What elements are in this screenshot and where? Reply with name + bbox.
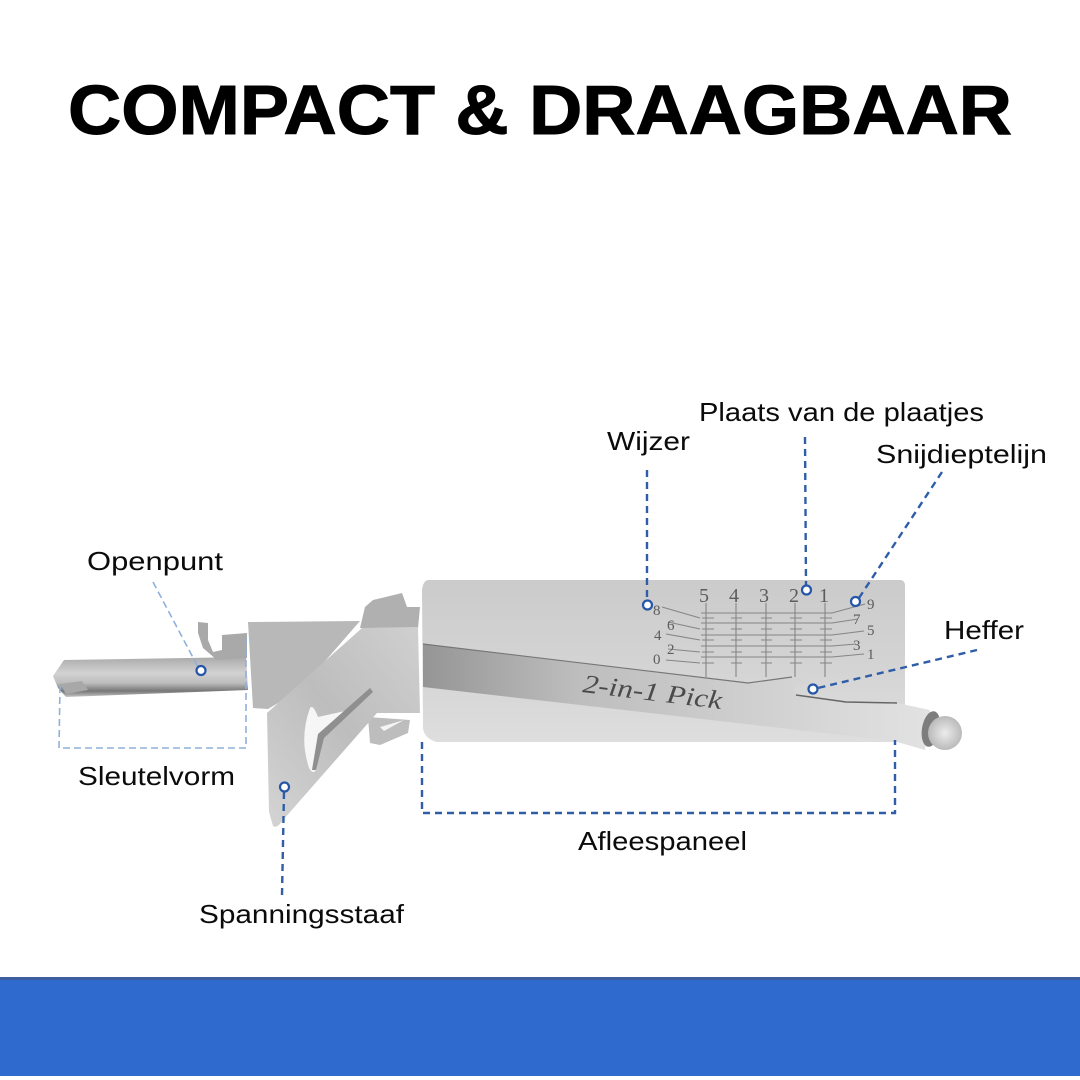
scale numbers: 3 (759, 585, 769, 607)
callout: Openpunt (87, 546, 224, 675)
scale numbers: 2 (667, 642, 674, 658)
scale numbers: 3 (853, 638, 860, 654)
bottom blue band (0, 977, 1080, 1076)
callout: Spanningsstaaf: Spanningsstaaf (199, 899, 405, 929)
callout: Sleutelvorm: Sleutelvorm (78, 761, 235, 791)
callout: Snijdieptelijn: Snijdieptelijn (876, 439, 1047, 469)
lever engraving: 2-in-1 Pick (581, 669, 724, 715)
callout: Heffer: Heffer (944, 615, 1024, 645)
tension bar plate (267, 627, 420, 827)
scale numbers: 8 (653, 603, 660, 619)
scale numbers: 0 (653, 652, 660, 668)
scale numbers: 9 (867, 597, 874, 613)
scale numbers: 7 (853, 612, 861, 628)
lever knob (919, 710, 962, 750)
callout: Plaats van de plaatjes: Plaats van de plaatjes (699, 397, 984, 427)
scale numbers: 5 (699, 585, 709, 607)
scale numbers: 4 (729, 585, 739, 607)
callout: Openpunt: Openpunt (87, 546, 224, 576)
callout: Plaats van de plaatjes (699, 397, 984, 594)
pick lever (423, 644, 930, 750)
callout: Spanningsstaaf (199, 782, 405, 929)
plate slot (304, 688, 373, 772)
top clip (360, 593, 420, 628)
depth scale (662, 603, 865, 677)
scale numbers: 1 (819, 585, 829, 607)
callout: Wijzer (607, 426, 690, 610)
scale numbers: 6 (667, 618, 675, 634)
callout: Heffer (808, 615, 1024, 694)
scale numbers: 4 (654, 628, 662, 644)
reading panel (422, 580, 905, 742)
rear clip (368, 717, 410, 745)
callout: Sleutelvorm (59, 635, 246, 791)
callout: Afleespaneel: Afleespaneel (578, 826, 747, 856)
scale numbers: 1 (867, 647, 874, 663)
scale numbers: 2 (789, 585, 799, 607)
callout: Wijzer: Wijzer (607, 426, 690, 456)
scale numbers: 5 (867, 623, 874, 639)
callout: Snijdieptelijn (851, 439, 1047, 606)
tool body block (248, 621, 360, 709)
illustration: 2-in-1 pick tool (53, 580, 962, 827)
key shaft (53, 622, 248, 697)
callout: Afleespaneel (422, 740, 895, 856)
scale numbers (653, 585, 874, 668)
title: COMPACT & DRAAGBAAR (68, 71, 1012, 149)
